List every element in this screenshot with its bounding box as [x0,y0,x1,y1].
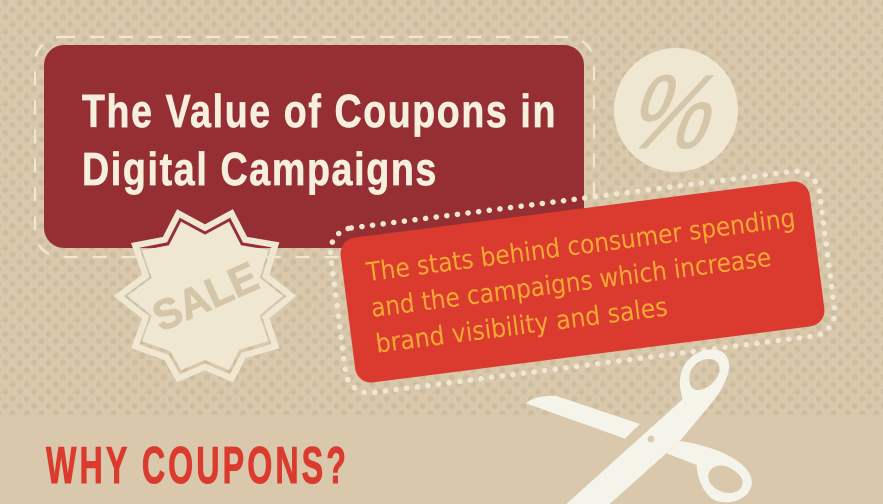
section heading: WHY COUPONS? [46,437,349,495]
subtitle text [364,204,806,360]
subtitle line 2: and the campaigns which increase [369,243,773,324]
scissors lower blade and handle [667,441,752,502]
starburst outer ring [119,213,291,378]
title line 1: The Value of Coupons in [82,85,557,137]
dotted coupon outline [327,168,838,396]
dashed coupon outline [35,37,594,257]
icon: scissors [526,349,752,504]
title line 2: Digital Campaigns [82,143,438,195]
percent sign: % [615,53,738,171]
subtitle line 3: brand visibility and sales [374,293,669,360]
title panel [44,45,584,248]
subtitle background [339,180,826,384]
percent badge [614,48,738,172]
scissors upper blade [526,396,640,439]
scissors handle and arm [563,349,729,504]
plain lower band [0,415,883,504]
scissors pivot [648,436,654,442]
starburst inner body [127,222,283,370]
subtitle panel [327,168,838,396]
subtitle line 1: The stats behind consumer spending [364,204,797,288]
sale label: SALE [145,253,265,340]
sale starburst badge [119,213,291,378]
